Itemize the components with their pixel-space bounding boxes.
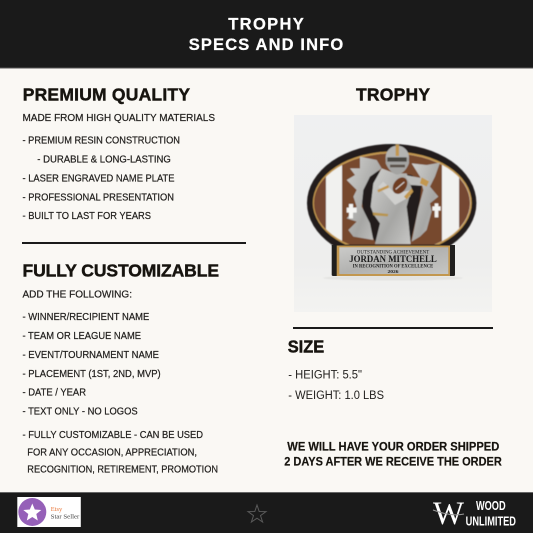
customization list: - FULLY CUSTOMIZABLE - CAN BE USED — [22, 429, 203, 441]
customization list: - PLACEMENT (1ST, 2ND, MVP) — [22, 368, 161, 380]
premium quality list: - PROFESSIONAL PRESENTATION — [22, 191, 174, 203]
name plate: OUTSTANDING ACHIEVEMENT — [357, 250, 429, 255]
premium quality list: - BUILT TO LAST FOR YEARS — [22, 210, 151, 222]
panel: fully customizable — [22, 261, 219, 476]
trophy photo — [294, 115, 492, 312]
size specs: - WEIGHT: 1.0 LBS — [288, 390, 384, 402]
customization list: ADD THE FOLLOWING: — [22, 289, 132, 301]
customization list: - TEXT ONLY - NO LOGOS — [22, 405, 138, 417]
size specs — [288, 370, 384, 402]
premium quality list — [22, 112, 215, 222]
premium quality list: - DURABLE & LONG-LASTING — [37, 153, 171, 165]
football burst and player — [347, 145, 441, 244]
heading: trophy: TROPHY — [356, 84, 430, 104]
footer bar — [0, 492, 533, 533]
badge: etsy star seller: Star Seller — [51, 513, 80, 520]
premium quality list: - LASER ENGRAVED NAME PLATE — [22, 172, 174, 184]
shipping note: WE WILL HAVE YOUR ORDER SHIPPED — [287, 442, 499, 454]
icon: outline star — [248, 505, 266, 522]
name plate: JORDAN MITCHELL — [349, 255, 437, 265]
customization list: RECOGNITION, RETIREMENT, PROMOTION — [27, 464, 218, 476]
header title — [189, 15, 343, 54]
panel: premium quality — [22, 84, 215, 222]
shipping note — [284, 442, 502, 469]
logo: wood unlimited: UNLIMITED — [466, 514, 516, 528]
customization list: FOR ANY OCCASION, APPRECIATION, — [27, 446, 197, 458]
logo: wood unlimited: W — [433, 496, 465, 532]
name plate: IN RECOGNITION OF EXCELLENCE — [353, 265, 433, 270]
header title: TROPHY — [228, 15, 304, 33]
premium quality list: - PREMIUM RESIN CONSTRUCTION — [22, 134, 180, 146]
panel: size — [288, 337, 384, 402]
heading: premium quality: PREMIUM QUALITY — [23, 84, 190, 104]
badge: etsy star seller: Etsy — [51, 506, 63, 513]
customization list: - WINNER/RECIPIENT NAME — [22, 311, 149, 323]
premium quality list: MADE FROM HIGH QUALITY MATERIALS — [22, 112, 215, 124]
customization list — [22, 289, 218, 476]
heading: size: SIZE — [288, 337, 324, 357]
icon: trophy plaque oval — [306, 143, 478, 246]
shipping note: 2 DAYS AFTER WE RECEIVE THE ORDER — [284, 457, 502, 469]
logo: wood unlimited: WOOD — [476, 499, 506, 513]
customization list: - DATE / YEAR — [22, 387, 86, 399]
customization list: - TEAM OR LEAGUE NAME — [22, 330, 141, 342]
customization list: - EVENT/TOURNAMENT NAME — [22, 349, 159, 361]
header title: SPECS AND INFO — [189, 36, 343, 54]
size specs: - HEIGHT: 5.5" — [288, 370, 362, 382]
heading: fully customizable: FULLY CUSTOMIZABLE — [22, 261, 219, 281]
badge: etsy star seller — [17, 497, 81, 527]
name plate — [332, 245, 455, 276]
logo: wood unlimited — [433, 496, 516, 532]
header banner — [0, 0, 533, 68]
name plate: 2026 — [388, 269, 398, 274]
